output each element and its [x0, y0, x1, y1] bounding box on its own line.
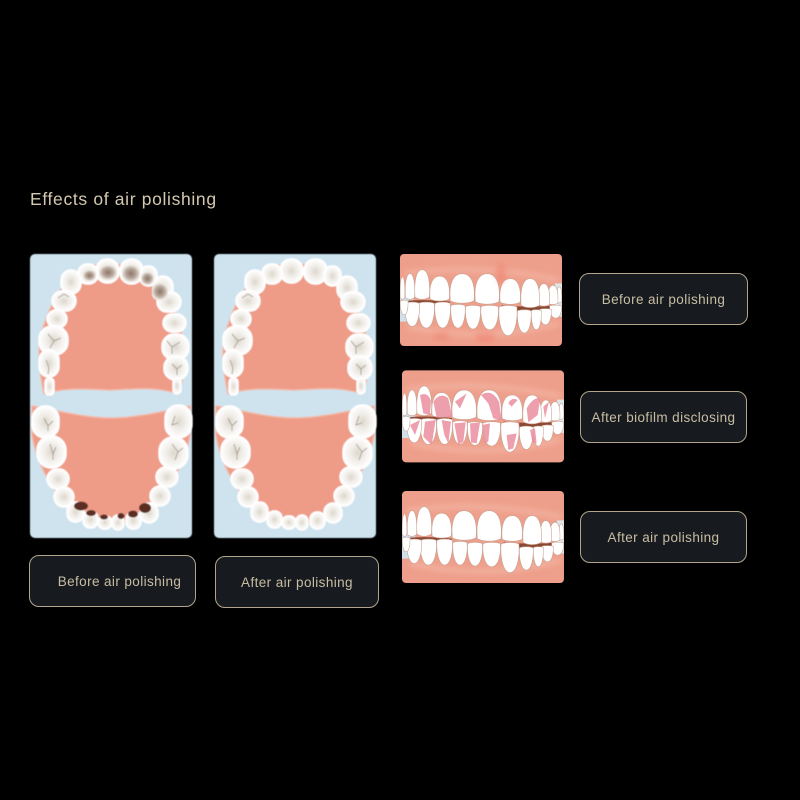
label: before air polishing (arch) — [29, 555, 196, 607]
label: after air polishing (arch) — [215, 556, 379, 608]
label: before air polishing (front) — [579, 273, 748, 325]
gum redness — [433, 263, 506, 342]
stained upper front teeth — [83, 265, 168, 300]
panel: front teeth after biofilm disclosing — [402, 370, 564, 462]
panel: arch before air polishing — [30, 254, 192, 538]
label: after biofilm disclosing: After biofilm disclosing — [592, 410, 735, 425]
title: Effects of air polishing — [30, 189, 217, 209]
label: after air polishing (arch): After air polishing — [241, 575, 353, 590]
biofilm patches — [410, 393, 549, 450]
panel: front teeth before air polishing — [400, 254, 562, 346]
panel: arch after air polishing — [214, 254, 376, 538]
label: before air polishing (arch): Before air polishing — [58, 574, 181, 589]
panel: front teeth after air polishing — [402, 491, 564, 583]
label: before air polishing (front): Before air polishing — [602, 292, 725, 307]
label: after biofilm disclosing — [580, 391, 747, 443]
label: after air polishing (front) — [580, 511, 747, 563]
dark stains on lower front teeth — [74, 502, 151, 520]
label: after air polishing (front): After air polishing — [608, 530, 719, 545]
